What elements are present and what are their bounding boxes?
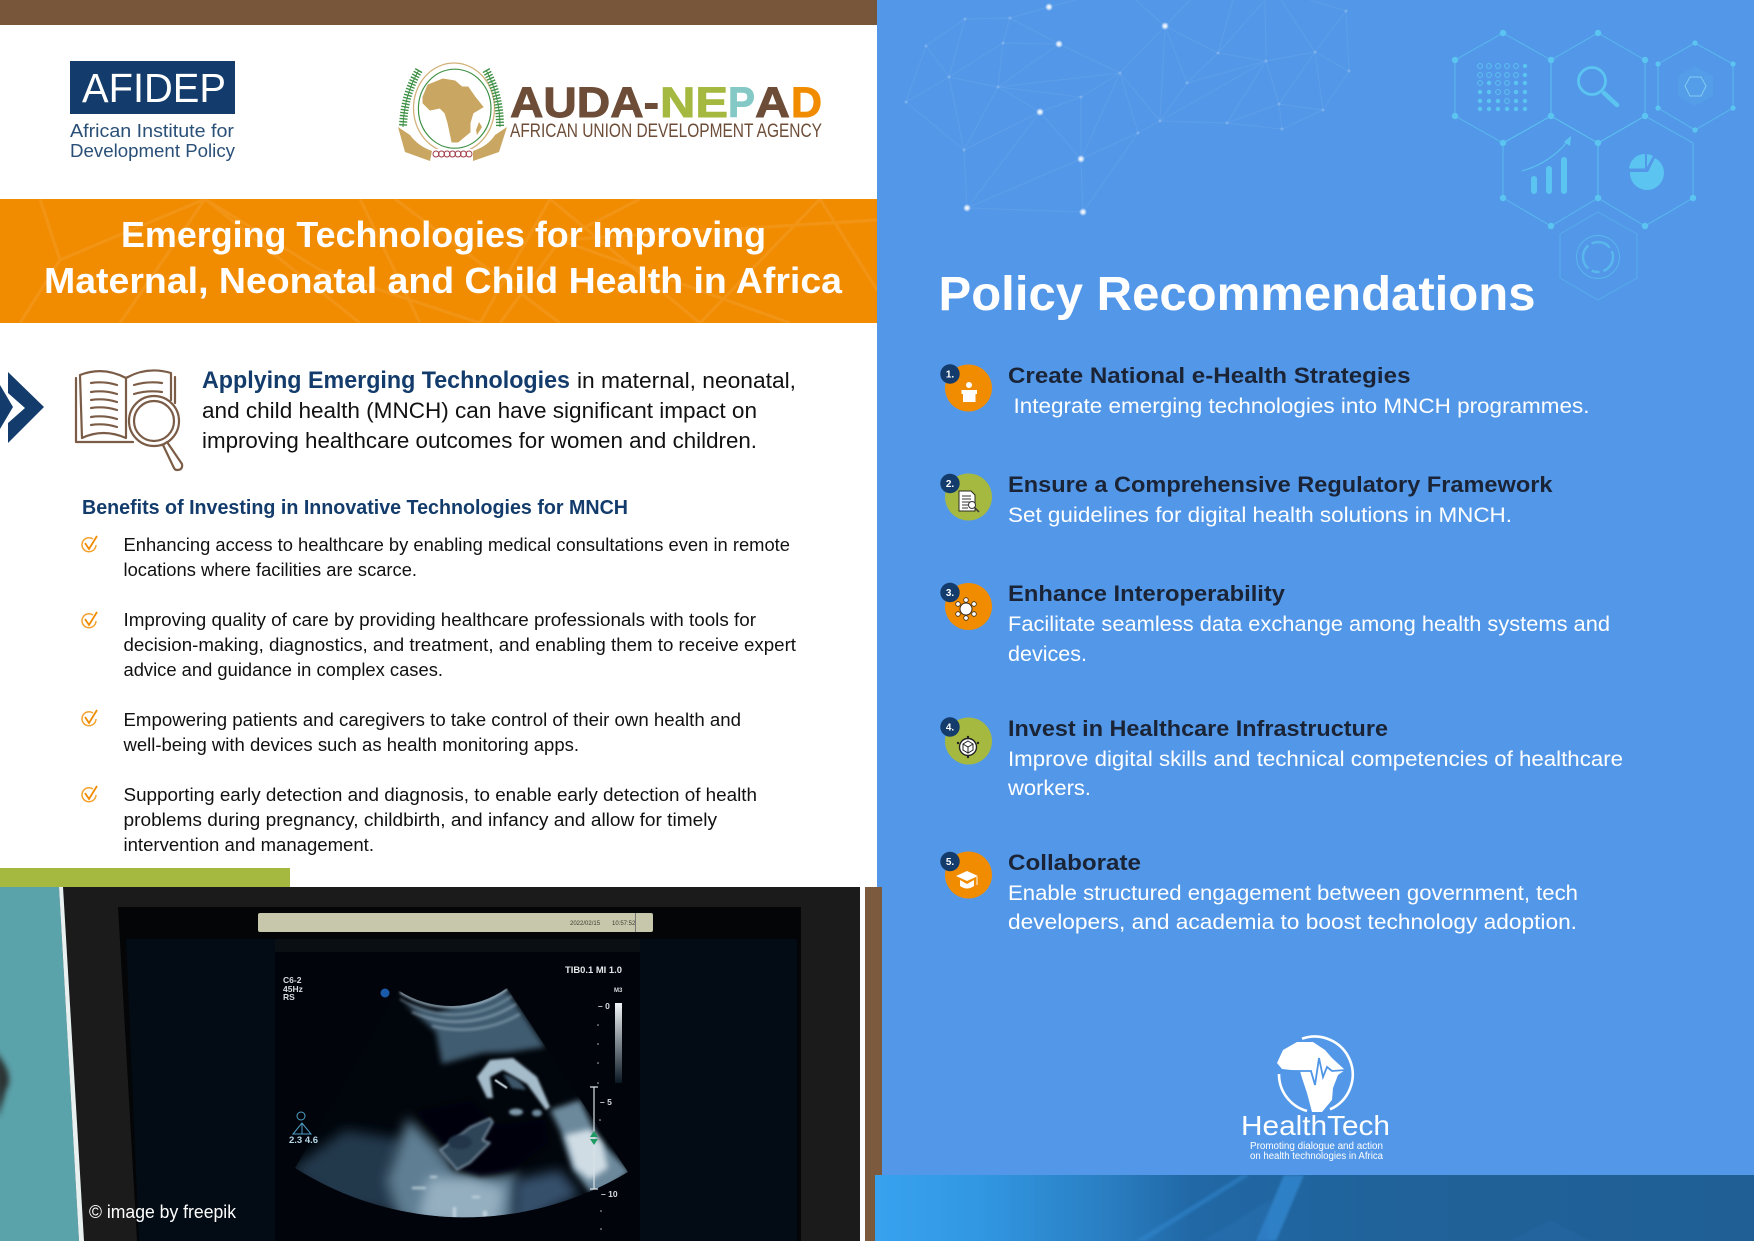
ultrasound sector image [290,988,630,1235]
screen labels: TIB0.1 MI 1.0 [565,965,622,976]
logo: HealthTech: on health technologies in Africa [1250,1151,1383,1162]
logo: AFIDEP [70,61,235,161]
bullet 1: Enhancing access to healthcare by enabling medical consultations even in remote [124,535,790,555]
icon: connected network: 3. [946,588,954,599]
panel: policy recommendations background [877,0,1754,1241]
text block: intro: and child health (MNCH) can have significant impact on [202,398,757,423]
screen labels: C6-2 [283,975,302,985]
icon: Africa heartbeat ring [1277,1037,1353,1112]
icon: cube in hexagon [940,717,992,764]
photo: ultrasound monitor: 2.3 4.6 [289,1135,318,1146]
bullet 2: decision-making, diagnostics, and treatment, and enabling them to receive expert [124,635,796,655]
wordmark: D [791,79,822,127]
wordmark: P [728,79,755,127]
status bar [258,913,653,932]
icon: magnifier [1578,68,1617,105]
dark cavity [418,1116,519,1180]
icon: inner hexagon [1678,66,1713,106]
screen labels: RS [283,992,295,1002]
screen labels: 45Hz [283,984,303,994]
screen labels: – 5 [600,1097,612,1107]
icon: graduation cap: 5. [946,857,954,868]
logo: AFIDEP: Development Policy [70,141,235,161]
screen labels: M3 [614,988,623,994]
bullet 3: Empowering patients and caregivers to take control of their own health and [124,710,741,730]
bullet 1 [82,535,790,580]
logo: AFIDEP: AFIDEP [82,65,226,111]
recommendation 3 [940,581,1610,666]
photo: ultrasound monitor [0,887,865,1241]
photo: ultrasound monitor: 2022/02/15 [570,921,601,927]
wordmark [510,79,822,142]
bullet 4: Supporting early detection and diagnosis, to enable early detection of health [124,785,757,805]
recommendation 2: Set guidelines for digital health solutions in MNCH. [1008,504,1512,527]
fetal head arc [477,1058,550,1110]
wordmark: A [755,79,790,127]
logo: HealthTech: Promoting dialogue and action [1250,1141,1383,1152]
fetal structure [440,1118,493,1170]
recommendation 3: devices. [1008,643,1087,666]
icon: connected network [940,583,992,630]
bullet 4 [82,785,757,855]
recommendation 3: Facilitate seamless data exchange among health systems and [1008,613,1610,636]
logo: HealthTech: HealthTech [1241,1110,1390,1141]
recommendation 5: Collaborate [1008,850,1141,875]
recommendation 5: developers, and academia to boost technology adoption. [1008,911,1577,934]
icon: podium [940,364,992,412]
icon: ring [1576,236,1620,278]
wordmark: NE [660,79,728,127]
recommendation 3: Enhance Interoperability [1008,581,1286,606]
recommendation 4: Improve digital skills and technical competencies of healthcare [1008,748,1623,771]
text block: intro: improving healthcare outcomes for women and children. [202,428,757,453]
icon: dot grid [1478,64,1527,111]
list: benefits [82,535,796,855]
photo: ultrasound monitor: 10:57:52 [612,921,636,927]
logo: HealthTech [1241,1037,1390,1162]
recommendation 4 [940,716,1623,800]
recommendation 1 [940,363,1590,418]
text block: intro [202,367,796,453]
icon: document review [940,474,992,520]
icon: open book with magnifier [76,370,182,470]
recommendation 4: workers. [1007,777,1091,800]
icon: growth chart [1522,136,1571,191]
caption: © image by freepik [89,1201,237,1222]
icon: double chevron [0,372,44,443]
bullet 2 [82,610,796,680]
icon: African Union emblem [398,63,507,161]
recommendation 5: Enable structured engagement between government, tech [1008,882,1578,905]
bottom gradient strip [875,1175,1754,1241]
heading: benefits: Benefits of Investing in Innovative Technologies for MNCH [82,496,628,519]
wordmark: AFRICAN UNION DEVELOPMENT AGENCY [510,121,822,142]
text block: intro: in maternal, neonatal, [577,368,796,393]
screen labels: – 10 [601,1189,618,1199]
monitor screen [118,907,801,1241]
recommendation 2 [940,472,1553,527]
recommendation 4: Invest in Healthcare Infrastructure [1008,716,1388,741]
icon: cube in hexagon: 4. [946,722,954,734]
bullet 4: problems during pregnancy, childbirth, and infancy and allow for timely [124,810,717,830]
title text: Emerging Technologies for Improving [121,214,766,255]
icon: podium: 1. [946,370,954,380]
recommendation 5 [940,850,1578,934]
central bright tissue [386,1118,517,1235]
wordmark: AUDA- [510,79,659,127]
logo: AFIDEP: African Institute for [70,121,234,141]
bullet 3: well-being with devices such as health monitoring apps. [122,735,579,755]
bullet 1: locations where facilities are scarce. [124,560,417,580]
hexagon technology icons [1452,30,1736,300]
text block: intro: Applying Emerging Technologies [202,367,570,394]
bullet 4: intervention and management. [124,835,374,855]
teal wall [0,887,79,1241]
icon: graduation cap [940,852,992,898]
right bright tissue [550,1100,630,1194]
network decoration [904,0,1350,216]
brown side strip [865,887,882,1241]
bullet 2: advice and guidance in complex cases. [124,660,443,680]
left faint tissue [290,1130,405,1215]
heading: policy recommendations: Policy Recommendations [938,268,1536,321]
right lower tissue [512,1170,580,1230]
icon: document review: 2. [946,479,954,490]
banner: title [0,199,877,323]
logo: AUDA-NEPAD [398,63,822,161]
screen labels [283,965,623,1199]
recommendation 2: Ensure a Comprehensive Regulatory Framework [1008,472,1553,497]
title text: Maternal, Neonatal and Child Health in Africa [44,260,843,301]
icon: pie chart [1629,154,1664,190]
bullet 2: Improving quality of care by providing healthcare professionals with tools for [124,610,756,630]
bullet 3 [82,710,741,755]
recommendation 1: Integrate emerging technologies into MNCH programmes. [1014,395,1590,418]
recommendation 1: Create National e-Health Strategies [1008,363,1410,388]
green accent bar [0,868,290,887]
top brown bar [0,0,877,25]
top tissue [405,990,545,1064]
title text [44,214,843,301]
screen labels: – 0 [598,1001,610,1011]
